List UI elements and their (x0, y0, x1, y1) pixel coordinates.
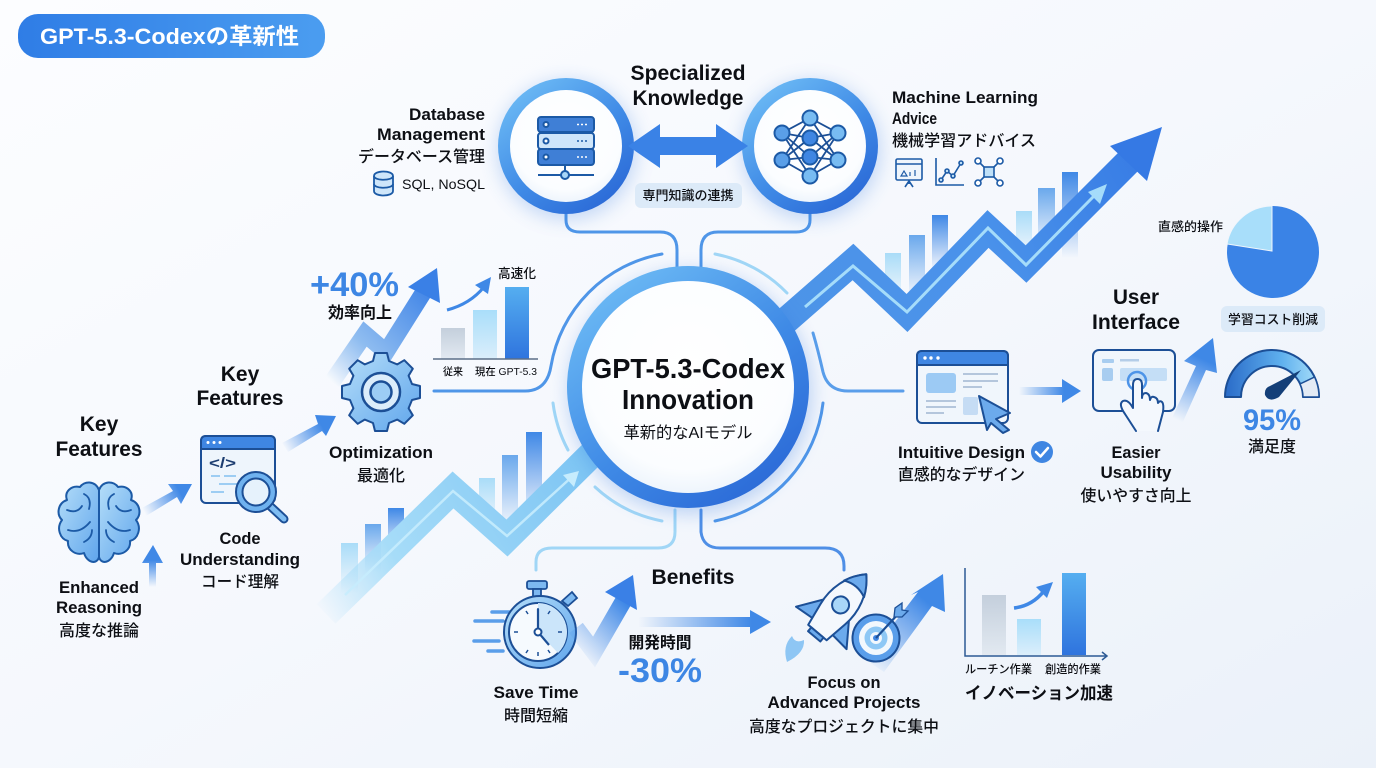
text block: code understanding: Understanding (180, 550, 300, 569)
title badge: GPT-5.3-Codexの革新性 (40, 24, 299, 49)
heading: user interface: Interface (1092, 311, 1180, 334)
icon: stopwatch (474, 581, 577, 668)
heading: key features 1: Features (56, 438, 142, 461)
stat: development time -30%: -30% (618, 652, 702, 690)
icon: target with dart (852, 603, 908, 662)
text block: easier usability: Usability (1100, 463, 1172, 482)
arrow: usability up (1172, 338, 1217, 424)
gauge: satisfaction (1225, 350, 1319, 400)
text block: database management: データベース管理 (358, 147, 485, 166)
upper-right growth zigzag arrow with bars (782, 127, 1162, 324)
text block: easier usability: Easier (1112, 443, 1161, 462)
panel: user interface (898, 206, 1325, 505)
text block: focus on advanced projects: 高度なプロジェクトに集中 (749, 718, 939, 736)
stat: 95% satisfaction: 満足度 (1248, 438, 1296, 456)
arrow: time to projects (638, 610, 771, 634)
hub title: GPT-5.3-Codex (591, 353, 785, 384)
database circle icon (497, 78, 637, 220)
text block: database management: Database (409, 105, 485, 124)
heading: specialized knowledge: Specialized (630, 62, 746, 85)
text block: machine learning advice (892, 88, 1038, 150)
arrow: brain to code (142, 484, 192, 516)
arrow: reasoning up (142, 545, 163, 587)
text block: optimization (329, 443, 433, 485)
hub Japanese caption: 革新的なAIモデル (624, 423, 752, 442)
arrow: projects up (866, 574, 945, 672)
icon: check badge (1031, 441, 1053, 463)
title badge (18, 14, 325, 58)
stat: 95% satisfaction: 95% (1243, 404, 1301, 437)
stat: +40% efficiency: 効率向上 (328, 304, 392, 322)
central hub circle (567, 266, 812, 514)
bar chart: speed up: 従来 (443, 365, 463, 378)
text block: save time (494, 683, 578, 725)
bar chart: routine vs creative work: ルーチン作業 (965, 662, 1032, 676)
arrow: two-way link (628, 124, 748, 168)
text block: optimization: 最適化 (357, 467, 405, 485)
icons: board, line chart, network (896, 158, 1003, 187)
text block: save time: Save Time (494, 683, 578, 702)
stat: development time -30% (618, 634, 702, 690)
text block: enhanced reasoning: Enhanced (59, 578, 139, 597)
label pill: knowledge link (635, 183, 742, 208)
heading: user interface: User (1113, 286, 1159, 309)
bar chart: speed up (433, 266, 538, 378)
bar chart: routine vs creative work: 創造的作業 (1045, 662, 1101, 676)
icon: database cylinder (374, 172, 393, 196)
arrow: design to usability (1019, 379, 1081, 403)
text block: database management (358, 105, 485, 192)
text block: code understanding (180, 529, 300, 591)
text block: machine learning advice: Advice (892, 109, 937, 128)
text block: focus on advanced projects (749, 673, 939, 736)
text block: optimization: Optimization (329, 443, 433, 462)
icon: code window with magnifier (201, 436, 284, 519)
stat: +40% efficiency: +40% (310, 266, 399, 304)
panel: benefits (474, 553, 1113, 736)
text block: enhanced reasoning: Reasoning (56, 598, 142, 617)
text block: intuitive design (898, 443, 1025, 484)
caption: innovation acceleration: イノベーション加速 (965, 684, 1113, 703)
heading: specialized knowledge (630, 62, 746, 110)
connector lines around the centre (434, 214, 903, 570)
label pill: knowledge link: 専門知識の連携 (642, 188, 734, 203)
text block: database management: Management (377, 125, 485, 144)
icon: design window with cursor (917, 351, 1010, 433)
heading: key features 2: Key (221, 363, 260, 386)
arrow: efficiency growth (332, 268, 440, 382)
neural network circle icon (741, 78, 881, 220)
text block: intuitive design: 直感的なデザイン (898, 465, 1025, 484)
text block: focus on advanced projects: Advanced Projects (768, 693, 920, 712)
text block: code understanding: コード理解 (201, 573, 279, 591)
icon: code window with magnifier: </> (209, 455, 236, 472)
text block: machine learning advice: 機械学習アドバイス (892, 132, 1036, 150)
heading: benefits: Benefits (652, 566, 734, 589)
arrow: time saving (576, 575, 637, 652)
icon: touch interface panel (1093, 350, 1175, 431)
arrow: code to optimization (282, 415, 336, 452)
text block: save time: 時間短縮 (504, 707, 568, 725)
text block: machine learning advice: Machine Learning (892, 88, 1038, 107)
heading: key features 1 (56, 413, 142, 461)
text block: enhanced reasoning: 高度な推論 (59, 622, 139, 640)
panel: specialized knowledge (358, 62, 1038, 220)
text block: intuitive design: Intuitive Design (898, 443, 1025, 462)
pie chart: intuitive operation: 直感的操作 (1158, 219, 1224, 234)
heading: key features 1: Key (80, 413, 119, 436)
icon: gear (342, 353, 420, 431)
bar chart: routine vs creative work (965, 568, 1107, 676)
icon: rocket (785, 553, 892, 662)
heading: key features 2 (196, 363, 284, 410)
text block: code understanding: Code (220, 529, 260, 548)
text block: focus on advanced projects: Focus on (808, 673, 880, 692)
icon: brain (59, 482, 139, 562)
heading: key features 2: Features (196, 387, 284, 410)
stat: 95% satisfaction (1243, 404, 1301, 456)
label pill: learning cost (1221, 306, 1325, 332)
heading: user interface (1092, 286, 1180, 334)
text block: enhanced reasoning (56, 578, 142, 640)
lower-left growth zigzag with bars (326, 432, 598, 614)
pie chart: intuitive operation (1158, 206, 1319, 298)
bar chart: speed up: 高速化 (498, 266, 536, 281)
panel: key features path (56, 266, 538, 640)
bar chart: speed up: 現在 GPT-5.3 (475, 365, 537, 378)
label pill: learning cost: 学習コスト削減 (1228, 312, 1318, 327)
heading: specialized knowledge: Knowledge (632, 87, 744, 110)
stat: +40% efficiency (310, 266, 399, 322)
text block: easier usability: 使いやすさ向上 (1080, 487, 1192, 505)
text block: easier usability (1080, 443, 1192, 505)
stat: development time -30%: 開発時間 (628, 634, 692, 652)
hub subtitle: Innovation (622, 384, 754, 415)
text block: database management: SQL, NoSQL (402, 176, 485, 192)
